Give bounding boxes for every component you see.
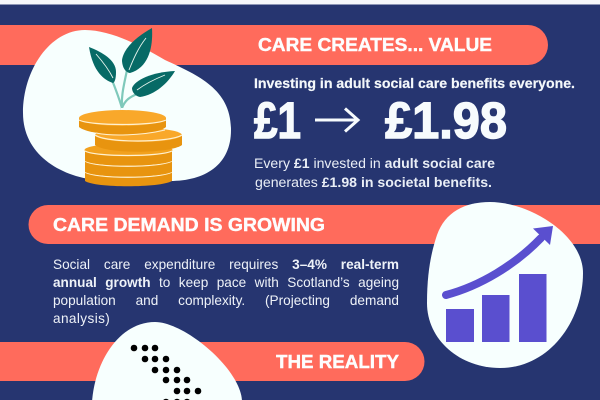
text: care demand paragraph: annual growth to keep pace with Scotland’s ageing <box>53 275 399 290</box>
stat: one pound: £1 <box>254 92 301 149</box>
arrow <box>315 108 358 132</box>
banner: care demand is growing <box>29 205 600 244</box>
text: care demand paragraph: analysis) <box>53 311 110 326</box>
text: care demand paragraph: population and complexity. (Projecting demand <box>53 293 399 308</box>
text: care demand paragraph: Social care expenditure requires 3–4% real-term <box>53 256 399 272</box>
stat: one pound ninety-eight: £1.98 <box>385 92 507 149</box>
illustration: reality blob with dots <box>92 322 242 400</box>
banner: the reality <box>0 342 425 381</box>
banner: the reality: THE REALITY <box>276 352 399 372</box>
illustration: growth chart <box>427 202 583 368</box>
text: societal benefits <box>254 156 495 190</box>
banner: care creates value <box>0 25 548 65</box>
banner: care creates value: CARE CREATES... VALUE <box>258 35 492 55</box>
text: societal benefits: generates £1.98 in societal benefits. <box>255 175 492 190</box>
illustration: coins and plant <box>23 28 231 186</box>
text: investing statement: Investing in adult social care benefits everyone. <box>254 75 575 91</box>
text: societal benefits: Every £1 invested in adult social care <box>254 156 495 171</box>
banner: care demand is growing: CARE DEMAND IS GROWING <box>53 215 325 235</box>
text: care demand paragraph <box>53 256 399 326</box>
